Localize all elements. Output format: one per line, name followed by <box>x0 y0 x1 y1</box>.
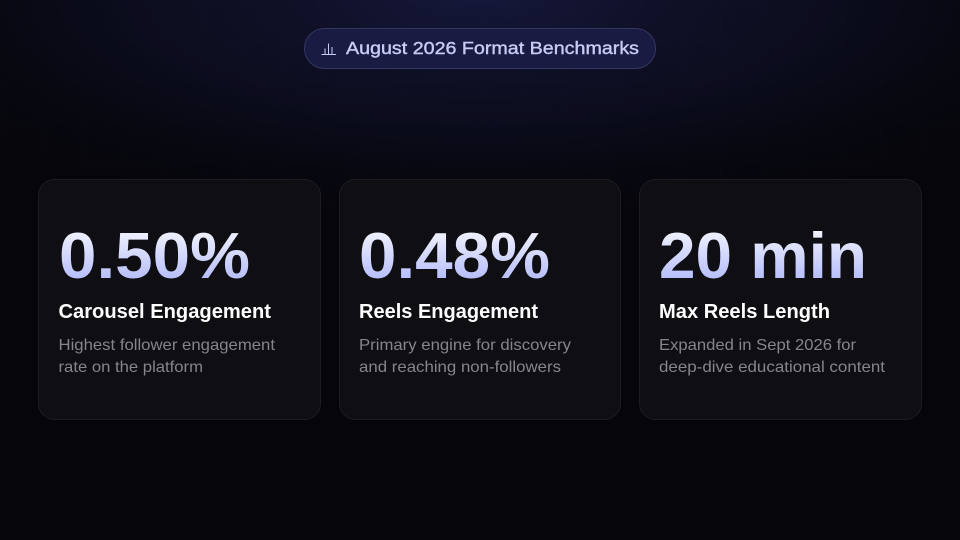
metric description: deep-dive educational content <box>659 359 886 376</box>
metric description: Highest follower engagement <box>58 337 276 354</box>
metric title: Reels Engagement <box>359 301 538 323</box>
metric description <box>58 337 276 376</box>
panel: carousel engagement <box>38 180 320 420</box>
metric description: rate on the platform <box>58 359 203 376</box>
metric description: Expanded in Sept 2026 for <box>659 337 857 354</box>
icon: bar chart <box>322 44 336 54</box>
metric value: 0.48% <box>359 219 550 292</box>
metric description: and reaching non-followers <box>359 359 561 376</box>
metric value: 20 min <box>659 219 867 292</box>
panel: reels engagement <box>340 180 620 420</box>
metric description <box>659 337 886 376</box>
pill heading: August 2026 Format Benchmarks <box>346 38 639 58</box>
metric title: Max Reels Length <box>659 301 830 323</box>
header pill <box>304 28 656 68</box>
metric value: 0.50% <box>59 219 250 292</box>
metric title: Carousel Engagement <box>58 301 271 323</box>
metric description: Primary engine for discovery <box>359 337 571 354</box>
panel: max reels length <box>640 180 922 420</box>
metric description <box>359 337 571 376</box>
